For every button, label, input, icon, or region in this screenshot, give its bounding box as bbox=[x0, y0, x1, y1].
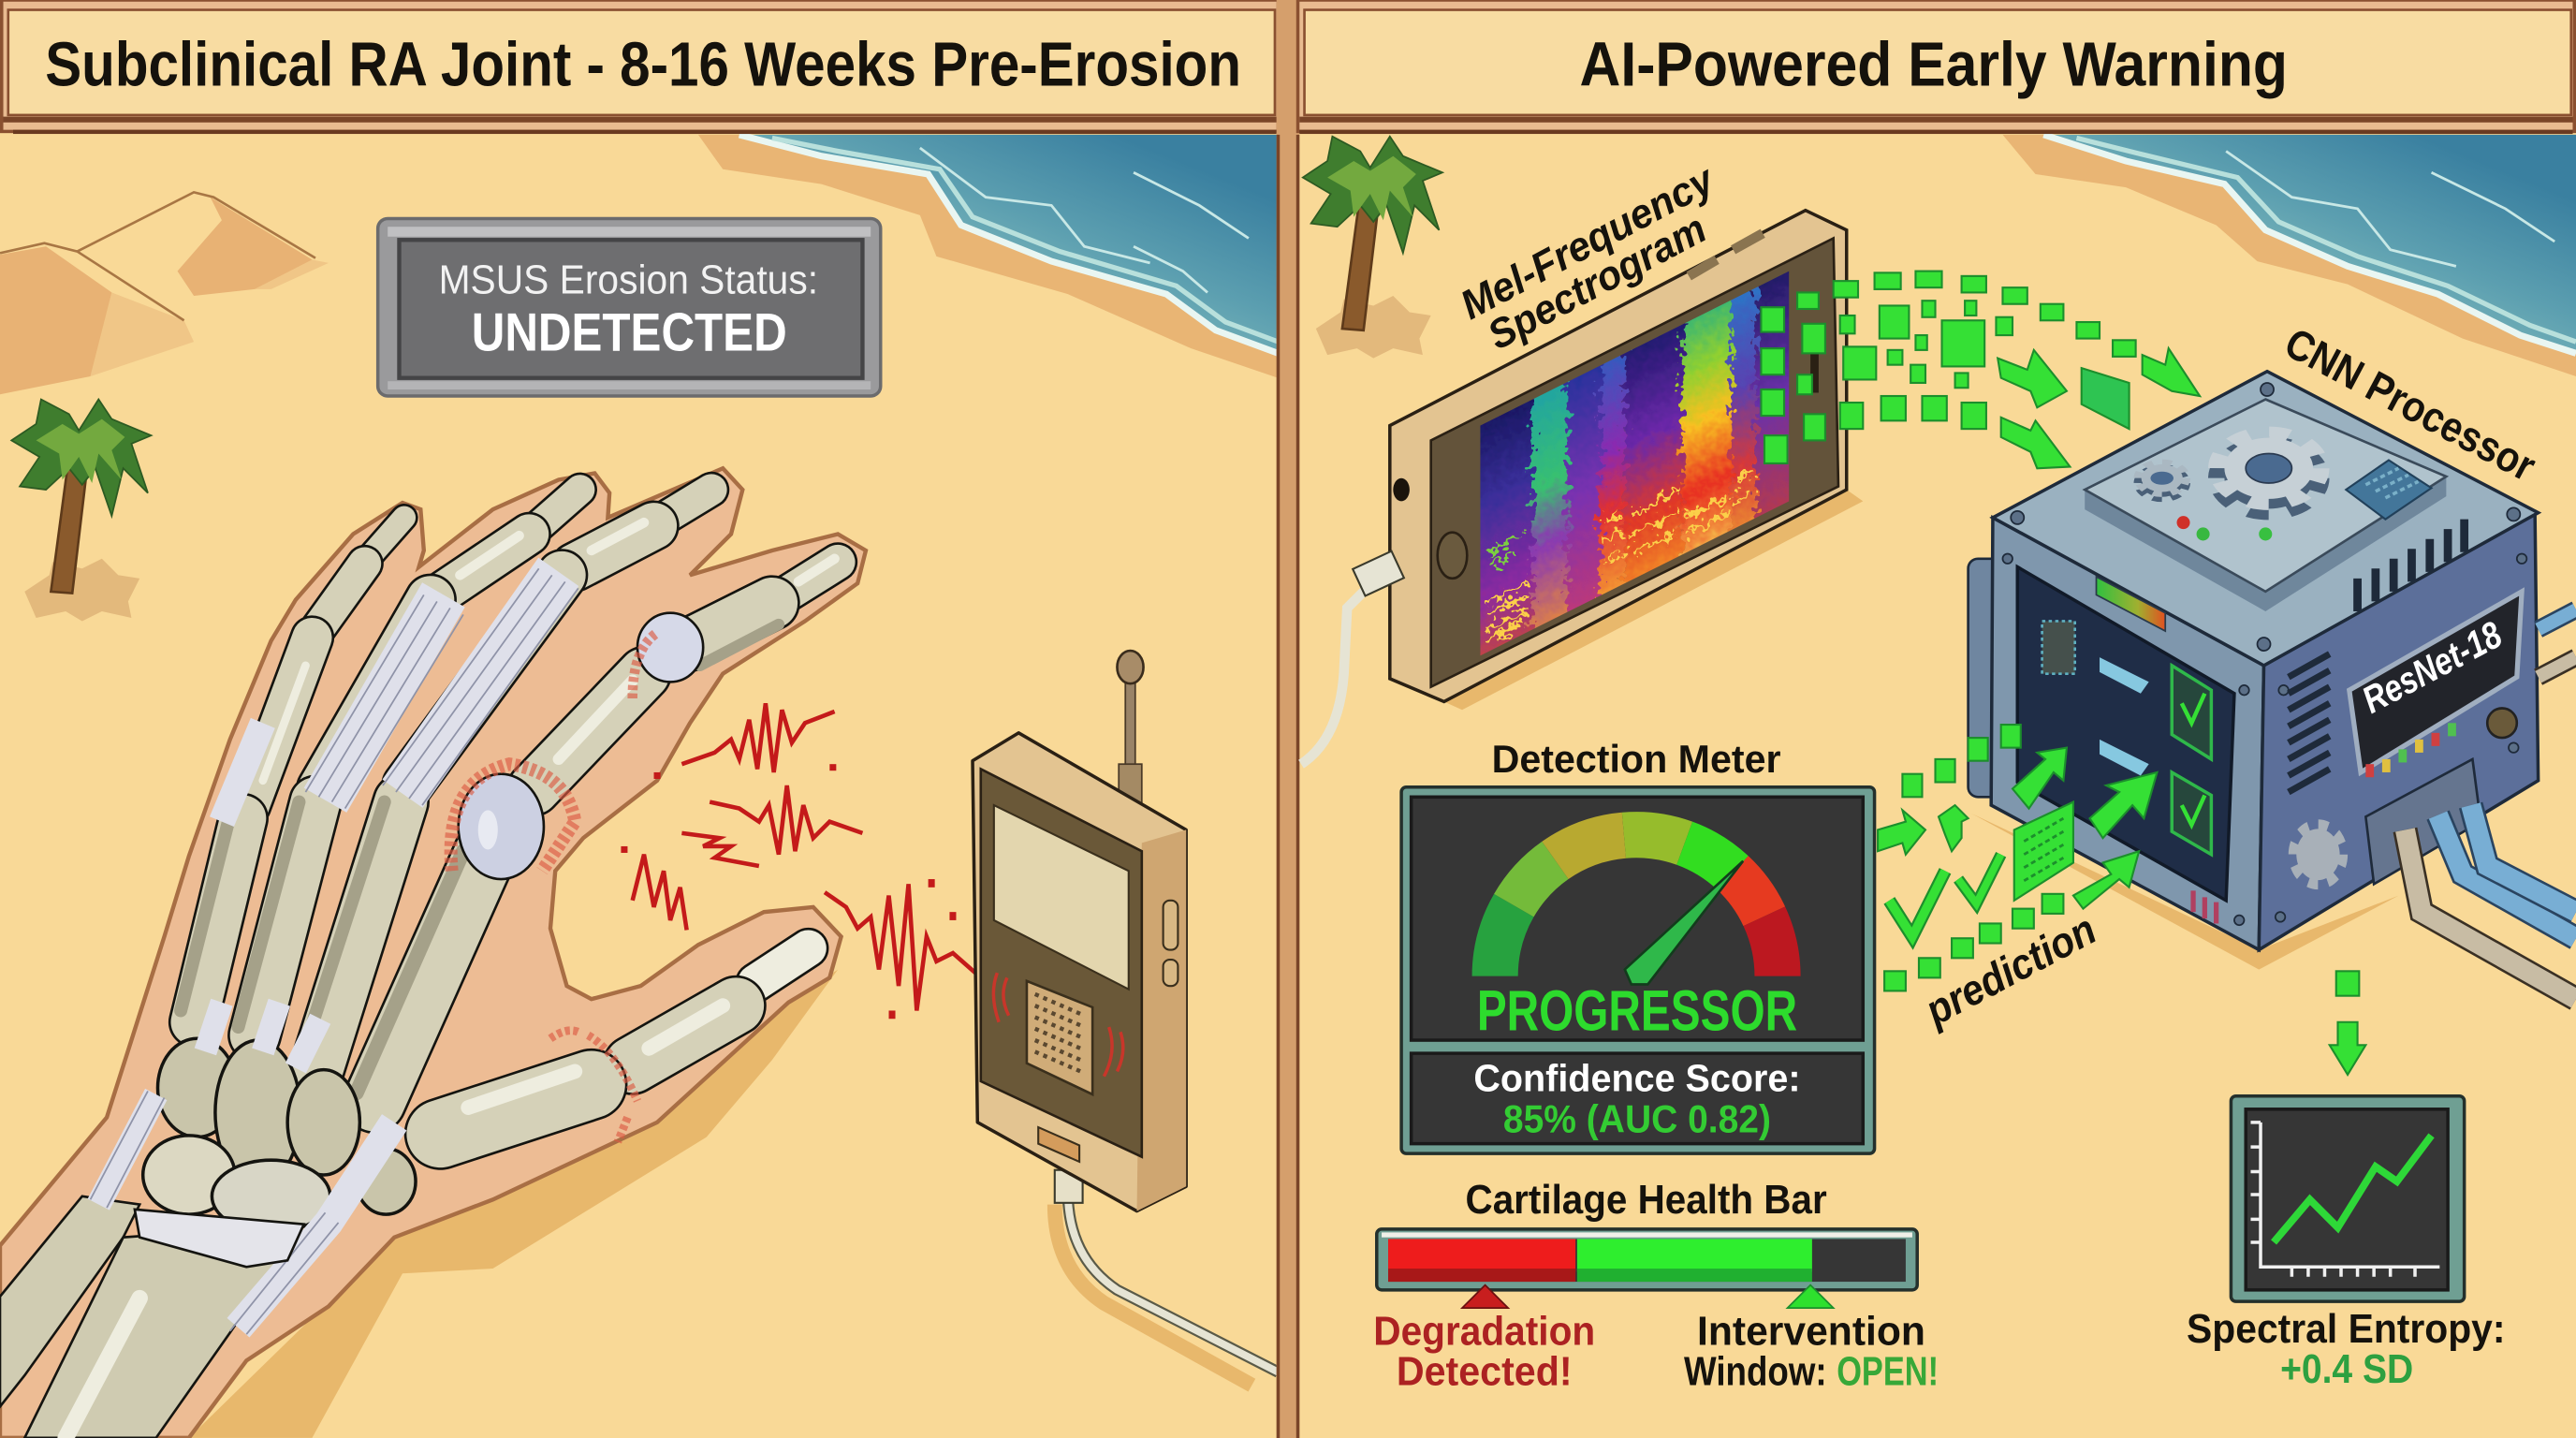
status sign: MSUS erosion status: MSUS Erosion Status: bbox=[439, 257, 818, 302]
beach and water, right bbox=[2002, 135, 2576, 376]
ResNet-18 nameplate bbox=[2349, 592, 2522, 772]
label: spectral entropy: Spectral Entropy: bbox=[2187, 1306, 2506, 1352]
right face bbox=[2259, 513, 2539, 950]
data pipes bbox=[2405, 609, 2576, 999]
dunes bbox=[0, 192, 329, 394]
panel: detection meter bbox=[1401, 787, 1875, 1153]
document bbox=[2014, 802, 2073, 901]
dashed upper arc bbox=[1797, 271, 2200, 396]
side module bbox=[1969, 559, 2001, 797]
label: intervention window: Intervention bbox=[1697, 1309, 1925, 1355]
label: CNN Processor: CNN Processor bbox=[2277, 318, 2543, 491]
stream source blocks bbox=[1761, 307, 1825, 463]
lower dashes bbox=[1884, 894, 2063, 990]
icon: palm tree, right bbox=[1303, 137, 1442, 359]
label: intervention window: Window: bbox=[1684, 1349, 1827, 1395]
pinky bones bbox=[181, 518, 404, 1022]
label: spectral entropy bbox=[2187, 1306, 2506, 1392]
status sign: MSUS erosion status bbox=[378, 218, 881, 396]
scattered data blocks bbox=[1840, 301, 2130, 429]
ResNet-18 nameplate: ResNet-18 bbox=[2355, 612, 2509, 722]
confidence score: Confidence Score: bbox=[1473, 1056, 1801, 1099]
dashed lower arc bbox=[1840, 396, 2070, 468]
title bar: right bbox=[1298, 0, 2574, 134]
arrows bbox=[1878, 748, 2157, 909]
label: spectral entropy: +0.4 SD bbox=[2280, 1346, 2413, 1392]
hand skin bbox=[0, 468, 866, 1438]
label: Mel-Frequency Spectrogram: Spectrogram bbox=[1481, 206, 1714, 359]
red stripes bbox=[2193, 890, 2217, 923]
status sign: MSUS erosion status: UNDETECTED bbox=[472, 303, 787, 363]
chip grid bbox=[2346, 460, 2432, 520]
handheld acoustic sensor device bbox=[973, 651, 1278, 1386]
LED level bar bbox=[2097, 577, 2165, 631]
spectrogram heatmap bbox=[1480, 271, 1790, 655]
left face bbox=[1991, 518, 2264, 950]
cartilage health bar bbox=[1377, 1229, 1917, 1290]
left panel: subclinical RA joint scene bbox=[0, 0, 1278, 1438]
panel: spectral entropy monitor bbox=[2231, 1096, 2465, 1301]
marker: green bbox=[1788, 1285, 1834, 1308]
ring finger bones bbox=[238, 490, 580, 1035]
charging plug bbox=[1353, 551, 1404, 596]
green prediction stream: CNN to meter bbox=[1878, 725, 2157, 990]
raised top plate bbox=[2085, 400, 2446, 611]
label: intervention window bbox=[1684, 1309, 1939, 1395]
label: intervention window: OPEN! bbox=[1837, 1349, 1939, 1395]
confidence score: 85% (AUC 0.82) bbox=[1503, 1096, 1771, 1140]
arrow: down to spectral monitor bbox=[2330, 971, 2365, 1075]
red acoustic crepitus signal waves bbox=[621, 703, 994, 1019]
cube shadow bbox=[1971, 814, 2398, 970]
middle finger bones bbox=[300, 490, 711, 1068]
gauge needle bbox=[1625, 861, 1743, 984]
label: degradation detected bbox=[1373, 1309, 1595, 1395]
right panel: AI-powered early warning scene bbox=[1298, 0, 2576, 1395]
antenna bbox=[1117, 651, 1144, 805]
label: Mel-Frequency Spectrogram: Mel-Frequency bbox=[1453, 155, 1723, 329]
cartilage erosion and inflammation bbox=[451, 613, 703, 1142]
title bar: left bbox=[2, 0, 1278, 134]
gauge arc bbox=[1472, 812, 1801, 976]
title bar: right: AI-Powered Early Warning bbox=[1580, 30, 2288, 99]
front screen bbox=[2017, 567, 2234, 901]
hand skeleton with inflamed joints bbox=[0, 468, 866, 1438]
confidence score bbox=[1473, 1056, 1801, 1140]
title bar: left: Subclinical RA Joint - 8-16 Weeks Pre-Erosion bbox=[45, 30, 1241, 99]
phone showing Mel-frequency spectrogram bbox=[1353, 211, 1863, 710]
forearm bones bbox=[0, 1196, 304, 1438]
upper dashes bbox=[1902, 725, 2021, 797]
chart line bbox=[2274, 1136, 2432, 1242]
PROGRESSOR: PROGRESSOR bbox=[1477, 979, 1797, 1044]
vents bbox=[2289, 520, 2465, 792]
heading: Cartilage Health Bar: Cartilage Health Bar bbox=[1466, 1177, 1827, 1223]
label: degradation detected: Degradation bbox=[1373, 1309, 1595, 1355]
green data stream: phone to CNN bbox=[1761, 271, 2200, 468]
cable bbox=[1055, 1170, 1278, 1386]
small gear bbox=[2138, 462, 2187, 499]
icon: palm tree, left bbox=[11, 400, 151, 621]
top face bbox=[1993, 372, 2539, 666]
cable to phone bbox=[1301, 567, 1388, 764]
CNN processor cube bbox=[1969, 372, 2539, 970]
chart axes bbox=[2250, 1123, 2439, 1277]
connector port bbox=[2365, 759, 2481, 884]
thumb bones bbox=[440, 948, 809, 1134]
wrist ligament band bbox=[135, 1210, 304, 1267]
marker: red bbox=[1462, 1285, 1508, 1308]
label: prediction: prediction bbox=[1917, 905, 2104, 1034]
center divider bbox=[1277, 0, 1299, 1438]
beach and water, left bbox=[698, 135, 1278, 378]
check marks bbox=[1889, 855, 2001, 936]
control buttons bbox=[2365, 709, 2517, 777]
port gear bbox=[2292, 825, 2343, 885]
label: degradation detected: Detected! bbox=[1397, 1349, 1573, 1395]
index finger bones bbox=[357, 559, 838, 1101]
status LEDs bbox=[2177, 516, 2272, 540]
degraded segment bbox=[1388, 1239, 1575, 1282]
carpal bones bbox=[143, 1038, 416, 1232]
heading: Detection Meter: Detection Meter bbox=[1492, 737, 1781, 781]
tendons bbox=[91, 568, 578, 1334]
hand shadow bbox=[189, 970, 838, 1438]
bolts bbox=[2002, 383, 2526, 925]
healthy segment bbox=[1577, 1239, 1812, 1282]
big gear bbox=[2217, 433, 2320, 514]
